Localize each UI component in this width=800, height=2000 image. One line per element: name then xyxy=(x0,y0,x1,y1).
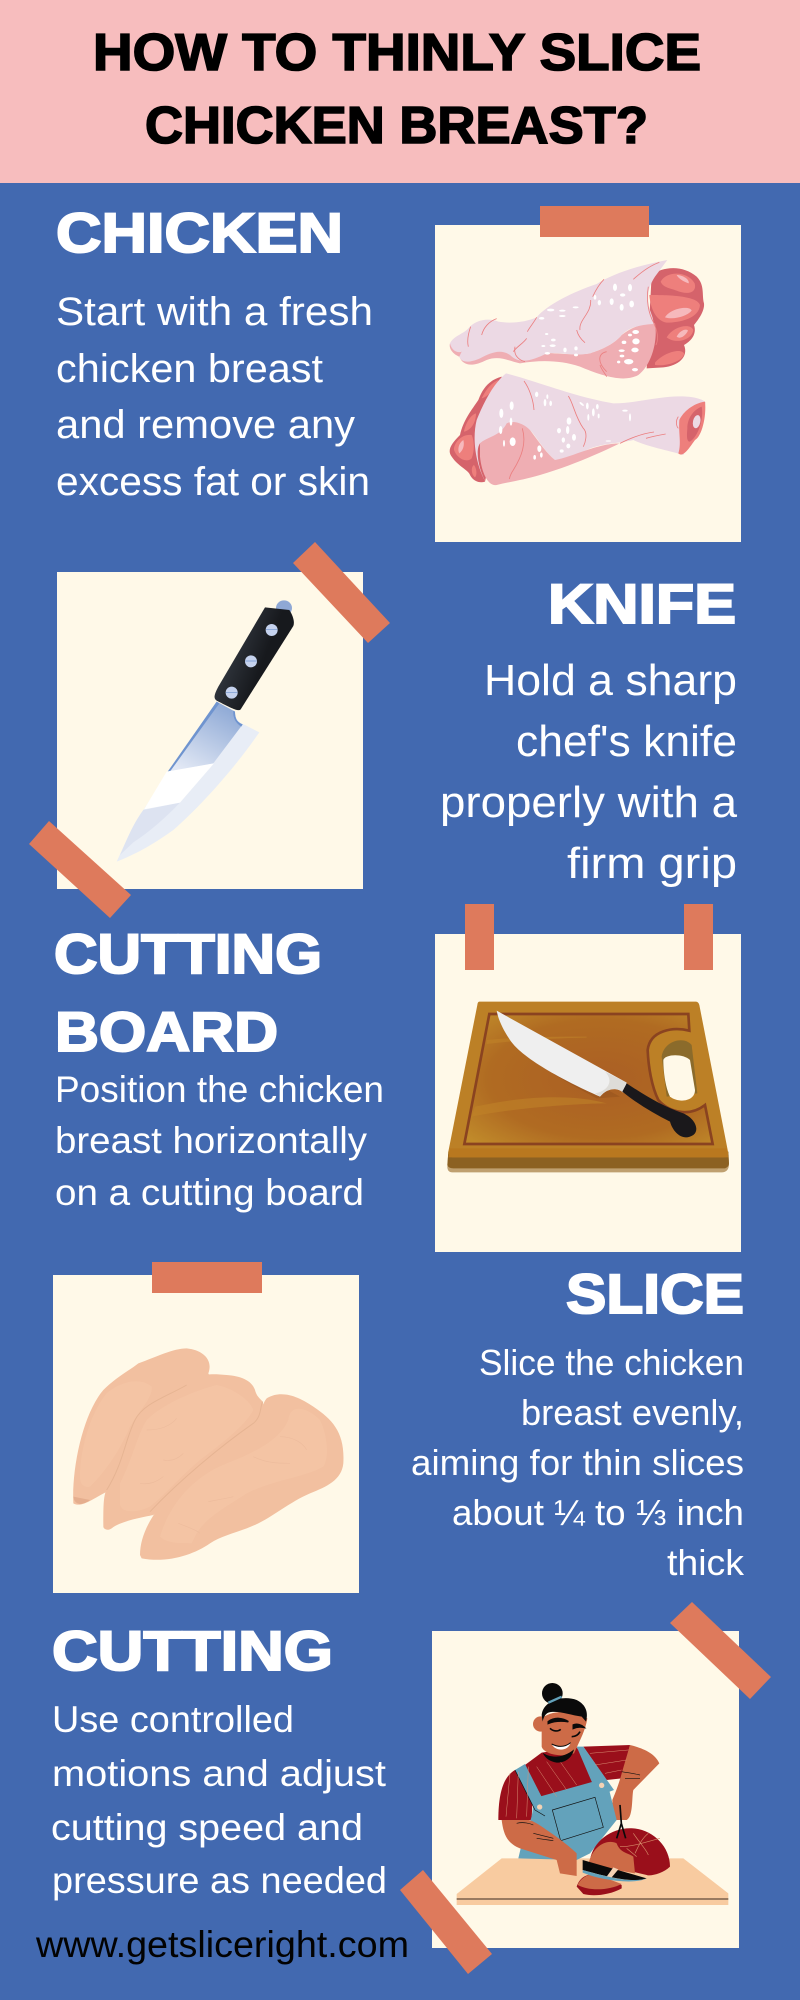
heading: slice: SLICE xyxy=(566,1262,744,1325)
icon: cutting board with knife xyxy=(447,1002,729,1172)
title banner xyxy=(0,0,800,183)
text block: chicken: chicken breast xyxy=(56,347,323,391)
text block: slice: aiming for thin slices xyxy=(411,1442,744,1483)
section: cutting board xyxy=(54,904,741,1252)
title banner: CHICKEN BREAST? xyxy=(145,97,648,155)
tape: left xyxy=(465,904,494,970)
text block: cutting board: on a cutting board xyxy=(55,1172,364,1213)
tape xyxy=(152,1262,262,1293)
text block: cutting: Use controlled xyxy=(52,1699,294,1740)
heading: cutting board: BOARD xyxy=(55,1000,278,1063)
tape xyxy=(540,206,649,237)
text block: slice: about ¼ to ⅓ inch xyxy=(452,1492,744,1533)
text block: cutting board xyxy=(55,1069,384,1213)
tape: bottom left xyxy=(400,1870,492,1974)
text block: cutting: motions and adjust xyxy=(52,1753,387,1794)
section: chicken xyxy=(56,201,741,542)
text block: cutting xyxy=(51,1699,387,1901)
text block: slice xyxy=(411,1342,745,1583)
text block: knife xyxy=(440,656,738,888)
text block: knife: properly with a xyxy=(440,778,738,827)
heading: cutting board xyxy=(54,922,322,1063)
text block: chicken: Start with a fresh xyxy=(56,290,373,334)
card: knife xyxy=(57,572,363,889)
card: cutting board xyxy=(435,934,741,1252)
icon: chef knife xyxy=(117,600,294,862)
icon: chef cutting meat xyxy=(457,1683,728,1905)
text block: cutting: pressure as needed xyxy=(52,1860,387,1901)
card: slice xyxy=(53,1275,359,1593)
heading: cutting board: CUTTING xyxy=(54,922,322,985)
section: cutting xyxy=(51,1602,771,1974)
tape: right xyxy=(684,904,713,970)
text block: slice: breast evenly, xyxy=(521,1392,744,1433)
text block: cutting board: breast horizontally xyxy=(55,1120,368,1161)
heading: cutting: CUTTING xyxy=(52,1619,333,1682)
card: chicken xyxy=(435,225,741,542)
text block: cutting: cutting speed and xyxy=(51,1807,363,1848)
section: knife xyxy=(29,542,738,918)
text block: chicken: excess fat or skin xyxy=(56,460,370,504)
tape: bottom left xyxy=(29,821,131,918)
text block: slice: Slice the chicken xyxy=(479,1342,744,1383)
heading: chicken: CHICKEN xyxy=(56,201,343,264)
text block: knife: firm grip xyxy=(567,839,737,888)
section: slice xyxy=(53,1262,745,1593)
tape: top right xyxy=(293,542,390,643)
text block: knife: Hold a sharp xyxy=(484,656,737,705)
text block: knife: chef's knife xyxy=(516,717,737,766)
website url: www.getsliceright.com xyxy=(35,1924,409,1965)
text block: slice: thick xyxy=(667,1542,745,1583)
text block: cutting board: Position the chicken xyxy=(55,1069,384,1110)
text block: chicken: and remove any xyxy=(56,403,355,447)
title banner: HOW TO THINLY SLICE xyxy=(93,24,701,82)
text block: chicken xyxy=(56,290,373,504)
icon: chicken breasts xyxy=(73,1348,343,1560)
heading: knife: KNIFE xyxy=(548,572,736,635)
icon: raw chicken drumsticks xyxy=(450,260,706,485)
card: cutting xyxy=(432,1631,739,1948)
tape: top right xyxy=(670,1602,771,1699)
